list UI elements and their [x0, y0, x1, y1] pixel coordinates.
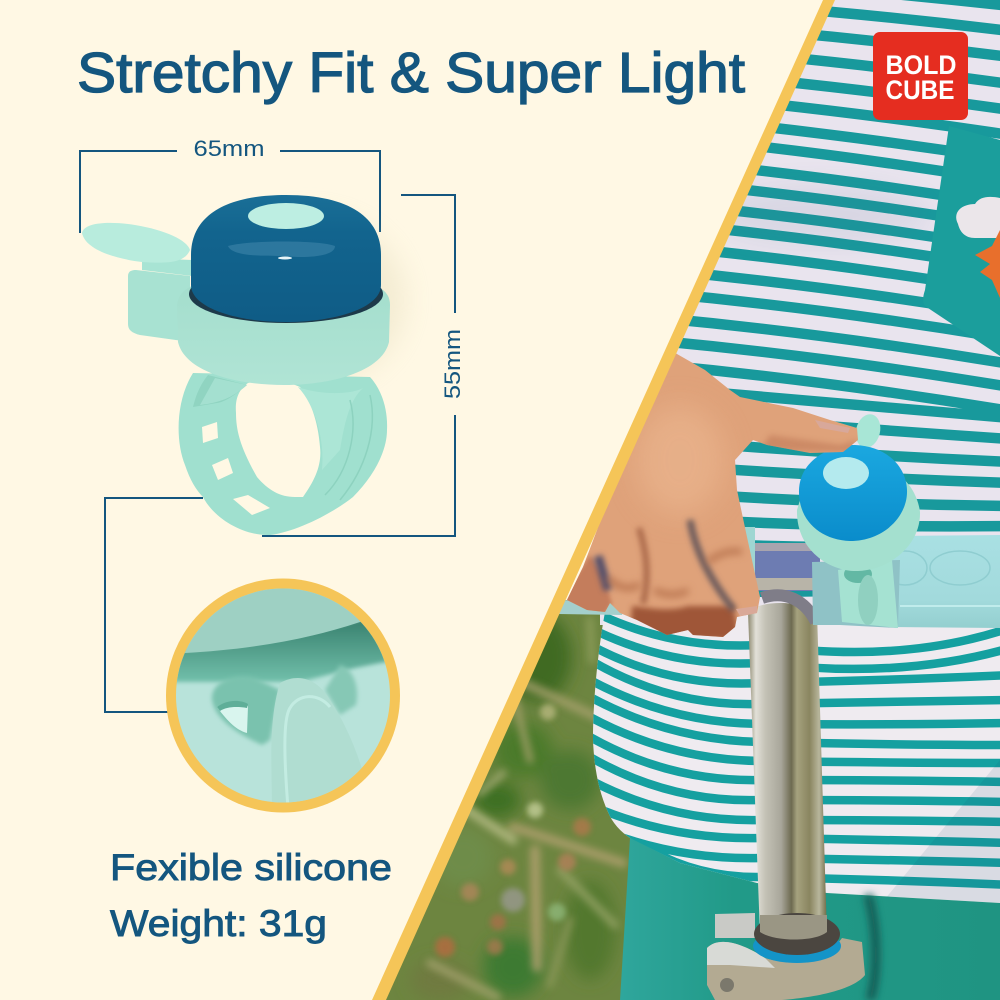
dimension: width 65mm: 65mm [194, 136, 264, 161]
hand base [555, 345, 865, 640]
pole clamp [707, 913, 865, 1000]
striped shirt upper [600, 0, 1000, 625]
thumb lever [82, 223, 190, 263]
pinky shadow [567, 556, 613, 612]
thumbnail [815, 420, 850, 433]
right handlebar grip [882, 535, 1000, 628]
pants [620, 838, 1000, 1000]
bell button [248, 203, 324, 229]
soft shadow [215, 215, 405, 385]
knuckle creases [608, 551, 742, 594]
cloud patch [956, 197, 1000, 238]
photo: child on scooter [370, 0, 1000, 1000]
fingertip [736, 606, 757, 616]
detail circle: silicone close-up [166, 578, 400, 812]
left handlebar grip [558, 527, 755, 615]
bell lever [856, 414, 880, 447]
dome underside shadow [189, 265, 383, 323]
material text [110, 847, 392, 944]
striped shirt lower [590, 610, 1000, 910]
strap opening [236, 380, 320, 497]
shadow band [170, 618, 395, 682]
bell product illustration [82, 195, 405, 535]
silicone strap [179, 373, 387, 535]
palm highlight [640, 412, 720, 508]
chrome handlebar [750, 543, 820, 591]
blue dome [191, 195, 381, 322]
dimension: width 65mm [80, 136, 380, 233]
bell button [823, 457, 869, 489]
logo: Bold Cube: CUBE [886, 75, 954, 105]
strap hole [212, 676, 280, 745]
hand [555, 345, 865, 640]
scooter pole [748, 595, 827, 935]
dimension: height 55mm: 55mm [440, 329, 465, 399]
mint ring [177, 285, 390, 385]
under-finger shadow [630, 606, 740, 640]
mounting tab [128, 270, 190, 342]
title: Stretchy Fit & Super Light [77, 41, 745, 105]
strap folded flute [298, 387, 363, 470]
right socket [325, 665, 357, 715]
logo: Bold Cube: BOLD [886, 50, 956, 80]
sun patch [975, 230, 1000, 298]
dimension: height 55mm [262, 195, 465, 536]
shirt pocket [920, 120, 1000, 360]
callout leader line [105, 498, 203, 712]
logo: Bold Cube [873, 32, 968, 120]
material text: Fexible silicone [110, 847, 392, 888]
ring underside [184, 588, 360, 653]
bell blue dome [799, 445, 907, 541]
thumb shading [760, 435, 858, 452]
strap ridge [272, 678, 362, 802]
weight text: Weight: 31g [110, 903, 327, 944]
yellow diagonal divider [372, 0, 835, 1000]
lever connector [142, 258, 192, 276]
bell clamp on handlebar [812, 560, 900, 628]
bell mint ring [797, 478, 920, 571]
strap flap [193, 375, 247, 407]
finger gaps [639, 528, 647, 604]
dome highlight [228, 242, 335, 257]
grass background [370, 600, 640, 1000]
